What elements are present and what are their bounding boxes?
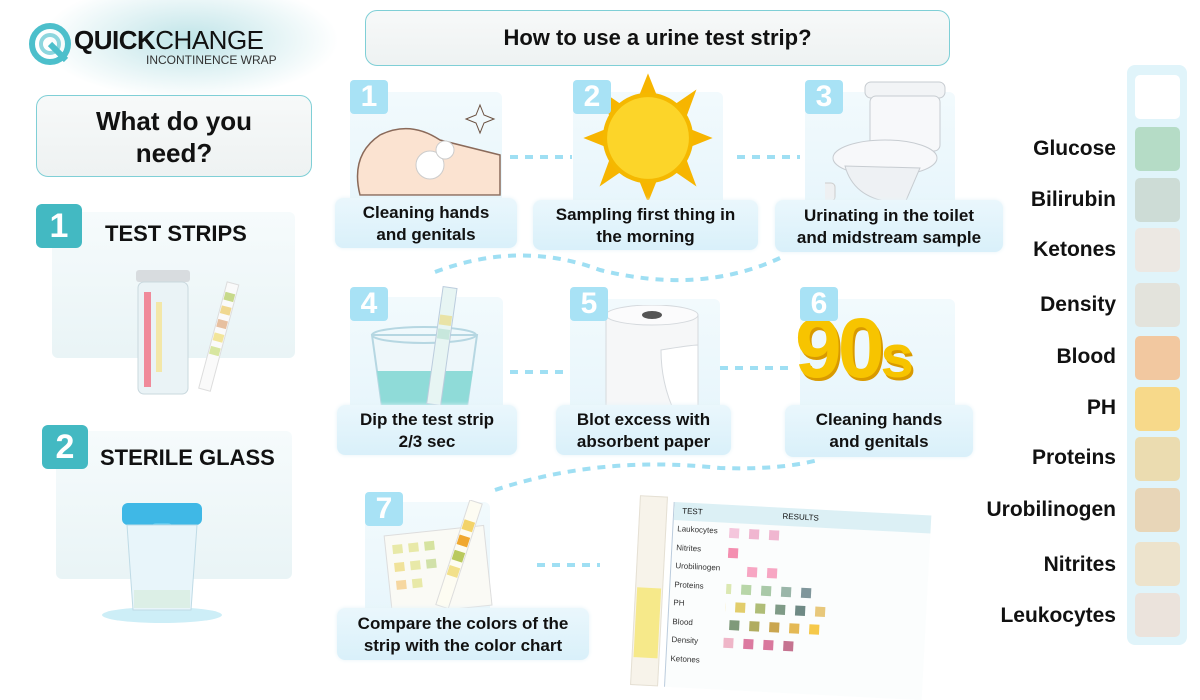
- chart: results table: Proteins: [674, 580, 704, 590]
- caption: [533, 200, 758, 250]
- icon: washing hands: [356, 104, 501, 196]
- caption: Urinating in the toilet: [804, 206, 974, 225]
- legend: ketones: Ketones: [1033, 238, 1116, 261]
- caption: strip with the color chart: [364, 636, 562, 655]
- chart: results table: [630, 495, 932, 687]
- caption: Compare the colors of the: [358, 614, 568, 633]
- legend: blood: Blood: [1057, 345, 1116, 368]
- chart: results table: Laukocytes: [677, 524, 718, 535]
- caption: Cleaning hands: [363, 203, 489, 222]
- icon: paper roll: [606, 305, 698, 405]
- legend: proteins: Proteins: [1032, 446, 1116, 469]
- legend: urobilinogen: Urobilinogen: [986, 498, 1116, 521]
- chart: results table: Blood: [672, 617, 693, 627]
- icon: 90s: 90s: [795, 301, 910, 395]
- chart: results table: Urobilinogen: [675, 561, 720, 573]
- icon: sterile cup: [102, 503, 222, 623]
- heading: what do you need: What do you: [96, 106, 252, 136]
- caption: [335, 198, 517, 248]
- step 7: 7: [376, 492, 392, 525]
- legend: glucose: Glucose: [1033, 137, 1116, 160]
- chart: results table: Ketones: [670, 654, 700, 664]
- step 4: 4: [361, 287, 377, 320]
- caption: [337, 405, 517, 455]
- step 2: 2: [584, 80, 600, 113]
- caption: [785, 405, 973, 457]
- icon: glass with strip: [370, 286, 478, 405]
- step 1: [334, 80, 518, 249]
- chart: results table: Density: [671, 635, 698, 645]
- step 6: [784, 287, 974, 460]
- chart: results table: TEST RESULTS: [682, 506, 819, 523]
- logo glow: [40, 0, 340, 100]
- caption: [556, 405, 731, 455]
- item 2 sterile glass: 2: [56, 428, 74, 466]
- caption: 2/3 sec: [399, 432, 455, 451]
- heading: what do you need: [36, 95, 312, 177]
- logo: INCONTINENCE WRAP: [146, 53, 277, 67]
- item 2 sterile glass: [42, 425, 292, 623]
- heading: what do you need: need?: [136, 138, 212, 168]
- caption: Dip the test strip: [360, 410, 494, 429]
- logo: QUICKCHANGE: [74, 25, 264, 55]
- caption: Cleaning hands: [816, 410, 942, 429]
- legend: density: Density: [1040, 293, 1116, 316]
- caption: and midstream sample: [797, 228, 981, 247]
- step 6: 6: [811, 287, 827, 320]
- legend: leukocytes: Leukocytes: [1000, 604, 1116, 627]
- item 1 test strips: [36, 204, 295, 394]
- caption: the morning: [596, 227, 695, 246]
- title: How to use a urine test strip?: [503, 25, 812, 50]
- caption: Blot excess with: [577, 410, 710, 429]
- step 5: [555, 287, 732, 456]
- legend: nitrites: Nitrites: [1044, 553, 1116, 576]
- caption: absorbent paper: [577, 432, 710, 451]
- title: [365, 10, 950, 66]
- caption: [337, 608, 589, 660]
- item 1 test strips: 1: [50, 207, 68, 245]
- chart: results table: PH: [673, 598, 685, 608]
- step 3: [774, 80, 1004, 253]
- step 1: 1: [361, 80, 377, 113]
- logo: [29, 23, 277, 67]
- panel: color legend: [1127, 65, 1187, 645]
- step 2: [532, 74, 759, 251]
- chart: results table: Nitrites: [676, 543, 701, 553]
- step 5: 5: [581, 287, 597, 320]
- icon: strip jar: [136, 270, 240, 394]
- icon: toilet: [825, 82, 946, 200]
- item 1 test strips: TEST STRIPS: [105, 221, 247, 246]
- step 7: [336, 492, 590, 661]
- step 4: [336, 286, 518, 456]
- legend: bilirubin: Bilirubin: [1031, 188, 1116, 211]
- caption: [775, 200, 1003, 252]
- caption: and genitals: [829, 432, 929, 451]
- step 3: 3: [816, 80, 832, 113]
- legend: PH: PH: [1087, 396, 1116, 419]
- item 2 sterile glass: STERILE GLASS: [100, 445, 275, 470]
- caption: and genitals: [376, 225, 476, 244]
- icon: color chart with strip: [384, 500, 492, 608]
- icon: sun: [584, 74, 712, 200]
- caption: Sampling first thing in: [556, 205, 735, 224]
